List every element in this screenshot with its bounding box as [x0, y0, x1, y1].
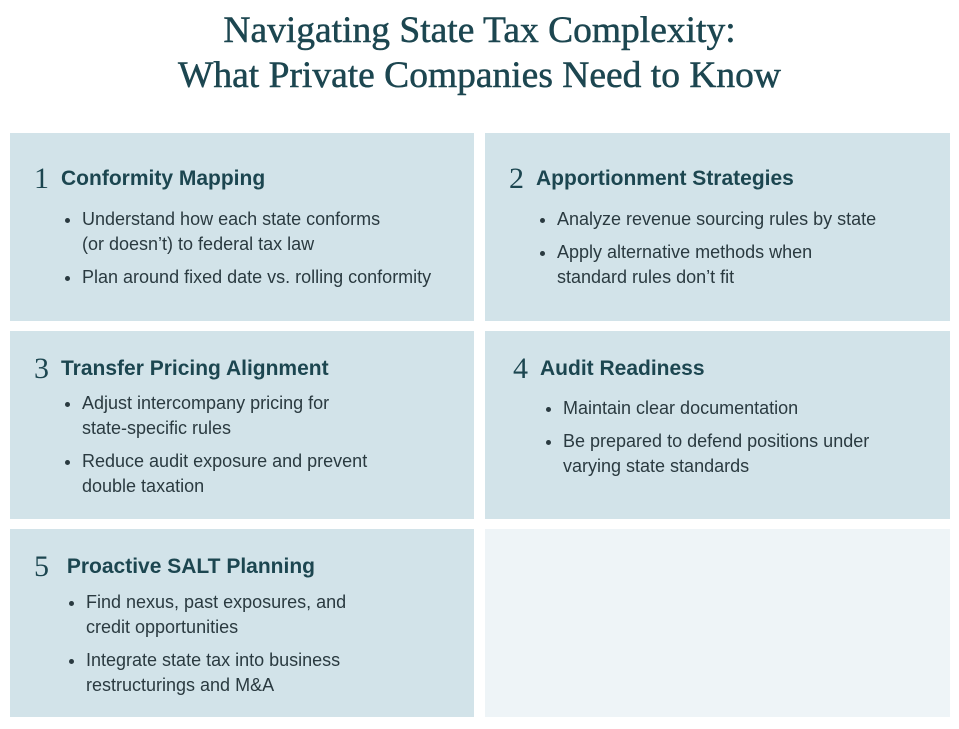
- heading 5: 5 Proactive SALT Planning: [34, 550, 315, 583]
- bullets 4: Be prepared to defend positions under: [563, 431, 869, 451]
- bullets 5: Integrate state tax into business: [86, 650, 340, 670]
- bullets 3: [65, 393, 368, 496]
- bullets 2: Analyze revenue sourcing rules by state: [557, 209, 876, 229]
- panel: conformity mapping: [10, 133, 474, 321]
- panel: audit readiness: [485, 331, 950, 519]
- bullets 2: [540, 209, 876, 287]
- bullets 3: Adjust intercompany pricing for: [82, 393, 329, 413]
- bullets 1: Plan around fixed date vs. rolling conformity: [82, 267, 431, 287]
- bullets 1: Understand how each state conforms: [82, 209, 380, 229]
- bullets 5: [69, 592, 346, 695]
- panel: proactive SALT: [10, 529, 474, 717]
- heading 1: 1 Conformity Mapping: [34, 162, 265, 195]
- panel: apportionment: [485, 133, 950, 321]
- bullets 5: Find nexus, past exposures, and: [86, 592, 346, 612]
- panel: empty: [485, 529, 950, 717]
- bullets 3: double taxation: [82, 476, 204, 496]
- bullets 2: standard rules don’t fit: [557, 267, 734, 287]
- title: [178, 10, 782, 96]
- heading 2: 2 Apportionment Strategies: [509, 162, 794, 195]
- panel: transfer pricing: [10, 331, 474, 519]
- bullets 4: [546, 398, 869, 476]
- title: What Private Companies Need to Know: [178, 55, 781, 96]
- bullets 3: Reduce audit exposure and prevent: [82, 451, 367, 471]
- bullets 2: Apply alternative methods when: [557, 242, 812, 262]
- bullets 3: state-specific rules: [82, 418, 231, 438]
- bullets 5: restructurings and M&A: [86, 675, 274, 695]
- bullets 4: varying state standards: [563, 456, 749, 476]
- title: Navigating State Tax Complexity:: [223, 10, 736, 51]
- bullets 1: (or doesn’t) to federal tax law: [82, 234, 314, 254]
- heading 3: 3 Transfer Pricing Alignment: [34, 352, 329, 385]
- bullets 5: credit opportunities: [86, 617, 238, 637]
- bullets 1: [65, 209, 432, 287]
- heading 4: 4 Audit Readiness: [513, 352, 705, 385]
- bullets 4: Maintain clear documentation: [563, 398, 798, 418]
